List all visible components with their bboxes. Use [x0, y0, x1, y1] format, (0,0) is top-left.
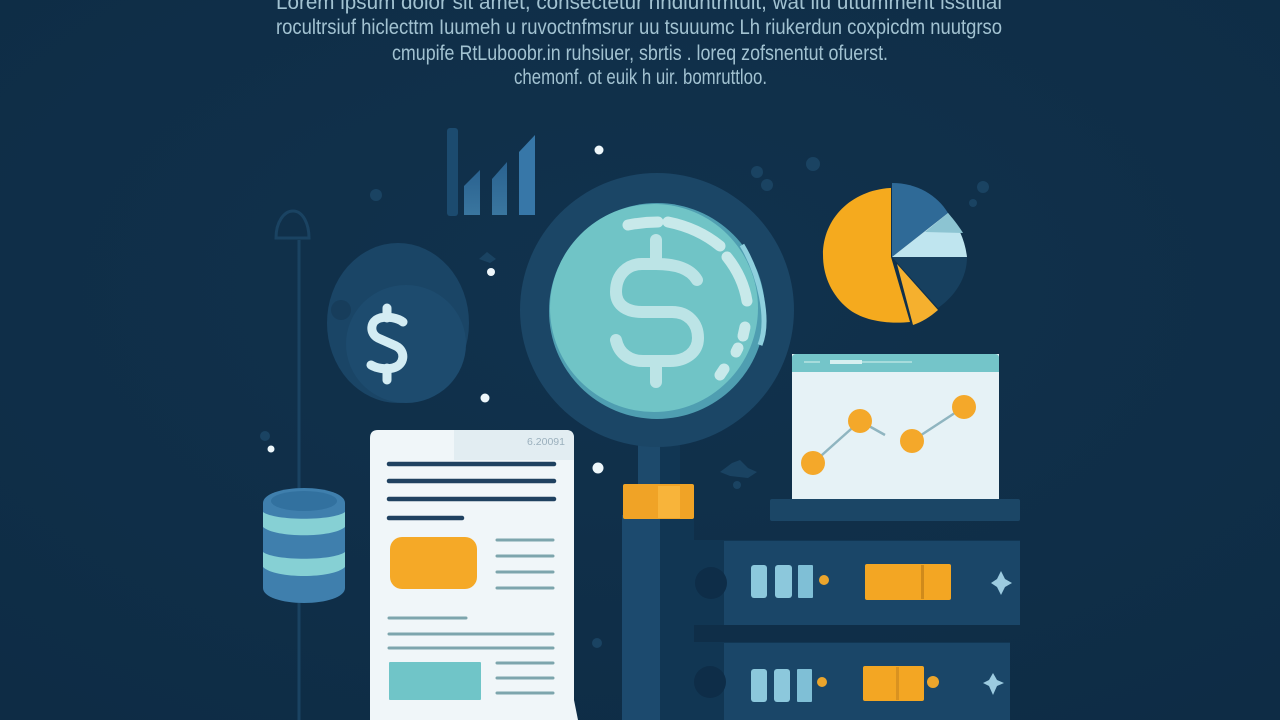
coin with dollar sign: [327, 243, 469, 403]
document heading lines: [389, 464, 554, 518]
document date label: 6.20091: [527, 437, 565, 448]
teal image block: [389, 662, 481, 700]
side text lines: [389, 540, 553, 693]
heading text block: chemonf. ot euik h uir. bomruttloo.: [514, 66, 767, 89]
dollar sign: [616, 240, 698, 382]
bar chart icon: [447, 128, 535, 216]
pie chart: [823, 183, 967, 325]
thermometer outline icon: [276, 211, 309, 720]
chart shelf: [770, 499, 1020, 521]
line chart card: [792, 354, 999, 499]
heading text block: [276, 0, 1002, 89]
handle: [622, 440, 694, 720]
decorative dots and blobs: [260, 146, 989, 648]
lens: [549, 203, 765, 419]
server rack top: [680, 540, 1020, 625]
orange collar: [623, 484, 694, 519]
document panel: [370, 430, 578, 720]
heading text block: cmupife RtLuboobr.in ruhsiuer, sbrtis . loreq zofsnentut ofuerst.: [392, 42, 888, 65]
glare arcs: [628, 222, 747, 375]
lens ring: [520, 173, 794, 447]
magnifying glass: [520, 173, 794, 720]
server rack bottom: [680, 642, 1010, 720]
database cylinder icon: [263, 488, 345, 603]
orange image block: [390, 537, 477, 589]
heading text block: rocultrsiuf hiclecttm Iuumeh u ruvoctnfmsrur uu tsuuumc Lh riukerdun coxpicdm nuutgrso: [276, 16, 1002, 39]
